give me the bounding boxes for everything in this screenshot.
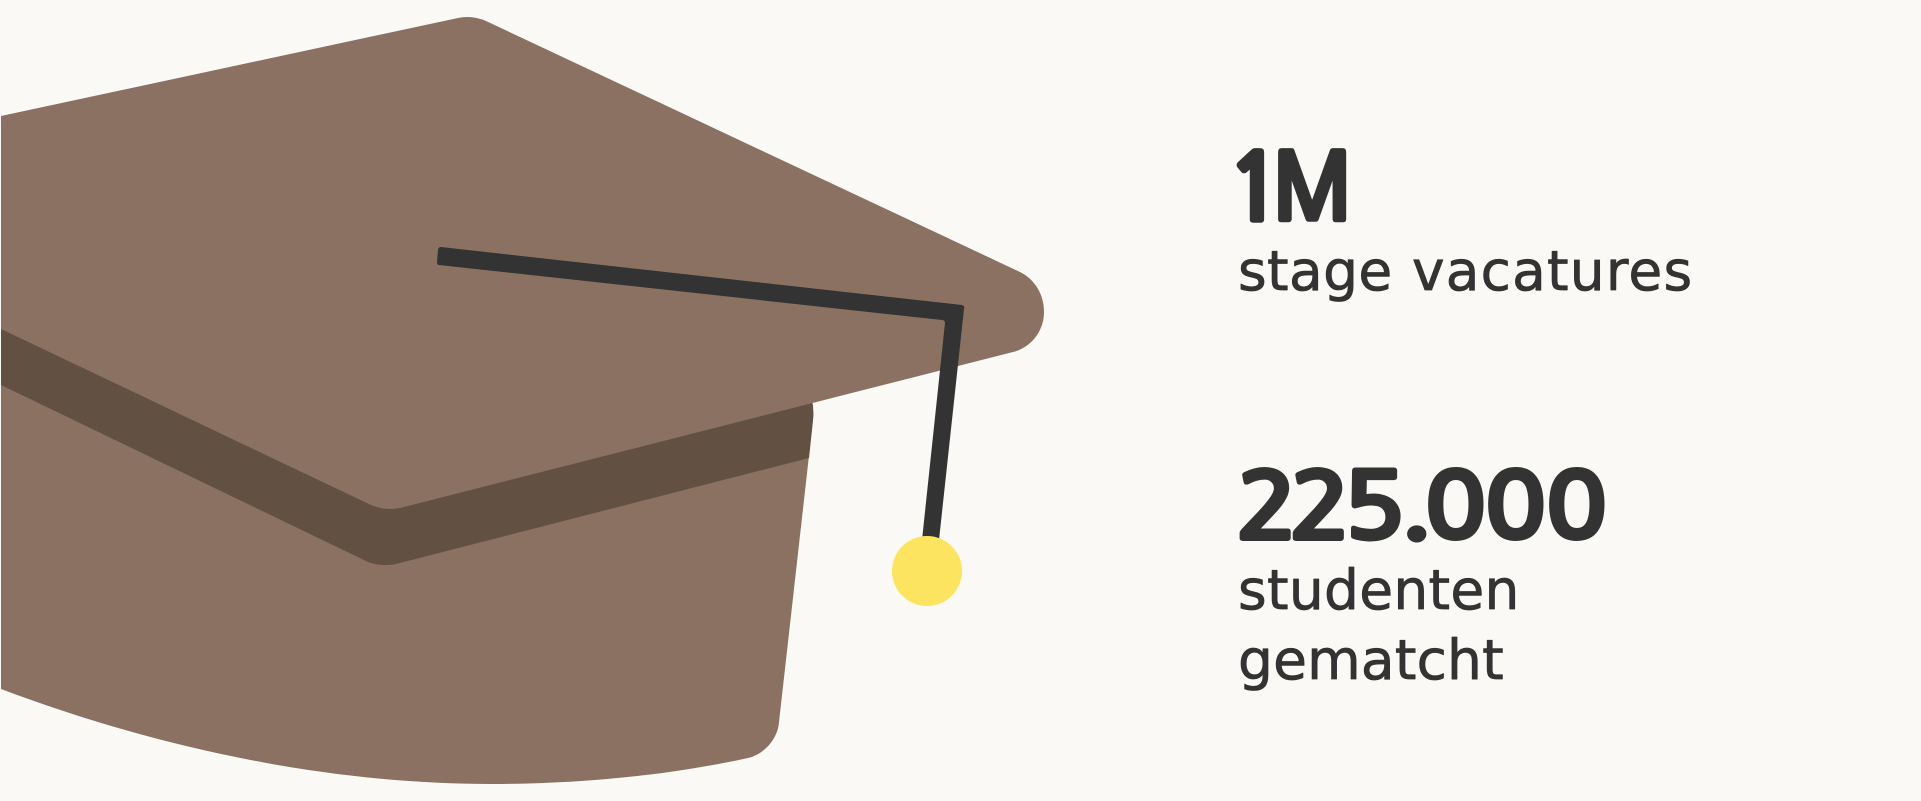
cap band shadow (1, 320, 813, 565)
tassel ball (892, 536, 962, 606)
stat label: gematcht (1238, 628, 1504, 692)
stat label (1238, 558, 1520, 692)
stat: stage vacatures (1227, 143, 1693, 303)
stat: studenten gematcht (1235, 457, 1608, 692)
stat number (1227, 143, 1352, 234)
stat number: M (1273, 143, 1352, 234)
stat number: 225.000 (1235, 457, 1608, 553)
cap base (1, 300, 813, 784)
stat label: studenten (1238, 558, 1520, 622)
icon: graduation cap (1, 17, 1044, 784)
stat label: stage (1238, 239, 1393, 303)
mortarboard top (1, 17, 1044, 509)
tassel cord (437, 247, 964, 540)
stat label: vacatures (1412, 239, 1693, 303)
stat number: 1 (1227, 143, 1283, 234)
